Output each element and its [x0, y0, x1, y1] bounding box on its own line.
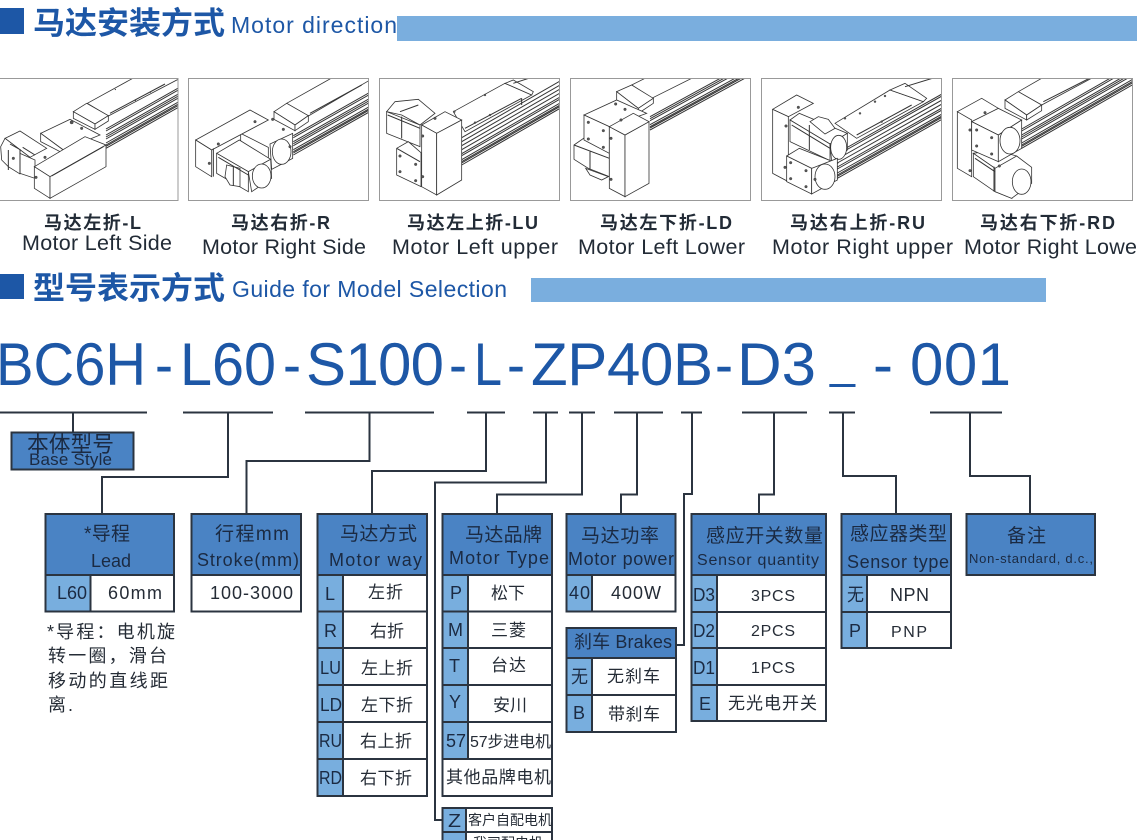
caption: motor right lower: 马达右下折-RD [980, 213, 1115, 233]
table: motor type [442, 514, 552, 796]
table: motor way: 马达方式 [340, 523, 417, 545]
table: sensor type: NPN [890, 585, 929, 605]
table: motor way: 左下折 [361, 696, 413, 715]
table: sensor type: 感应器类型 [850, 523, 947, 545]
note: lead definition: 移动的直线距 [48, 671, 168, 691]
caption: motor right upper [772, 213, 953, 259]
caption: motor right lower [964, 213, 1137, 259]
table: motor type: 松下 [491, 584, 525, 603]
table: brakes: B [573, 703, 585, 723]
caption: motor left lower: Motor Left Lower [578, 235, 745, 259]
caption: motor right side [202, 213, 366, 259]
table: sensor quantity: 感应开关数量 [706, 525, 823, 547]
table: sensor quantity: E [699, 694, 711, 714]
model code [0, 331, 1011, 398]
caption: motor left upper [392, 213, 558, 259]
caption: motor left side [22, 213, 172, 255]
model code: 001 [910, 331, 1011, 398]
model code: L60 [180, 331, 276, 398]
table: motor way: 右下折 [360, 769, 412, 788]
table: stroke: Stroke(mm) [197, 550, 299, 570]
panel: motor left upper [380, 74, 572, 200]
table: remarks [966, 514, 1095, 575]
table: motor way: LU [320, 658, 341, 678]
table: customer motor: Z [448, 811, 461, 831]
table: sensor quantity: Sensor quantity [697, 552, 819, 569]
caption: motor right upper: Motor Right upper [772, 235, 953, 259]
table: customer motor: 客户自配电机 [468, 812, 552, 828]
panel: motor left lower [570, 78, 751, 201]
table: sensor quantity: D2 [693, 621, 715, 641]
table: sensor quantity: 无光电开关 [728, 694, 817, 713]
table: motor way: 左折 [368, 583, 403, 602]
table: motor power: 400W [611, 583, 661, 603]
panel: motor right upper [762, 78, 947, 200]
table: sensor quantity: 1PCS [751, 660, 795, 677]
table: motor type: 其他品牌电机 [446, 768, 551, 787]
table: brakes: 刹车 Brakes [574, 632, 672, 652]
model code: - [507, 331, 525, 398]
table: motor type: 三菱 [491, 621, 526, 640]
model code: - [449, 331, 467, 398]
model code: - [715, 331, 733, 398]
header bar [397, 16, 1137, 41]
table: stroke: 行程mm [215, 523, 289, 545]
table: motor way: RU [319, 731, 342, 751]
table: motor power [566, 514, 676, 612]
table: motor power: 40 [569, 583, 590, 603]
heading: model selection: 型号表示方式 [33, 271, 225, 306]
caption: motor left side: Motor Left Side [22, 231, 172, 255]
model code: L [474, 331, 502, 398]
table: motor way: LD [320, 695, 342, 715]
caption: motor right side: 马达右折-R [231, 213, 330, 233]
table: sensor quantity: D3 [693, 585, 715, 605]
table: motor way [318, 514, 427, 796]
subheading: model selection: Guide for Model Selection [232, 276, 507, 302]
note: lead definition: 转一圈，滑台 [48, 646, 167, 666]
heading: motor direction: 马达安装方式 [33, 6, 225, 41]
note: lead definition: 离. [48, 695, 73, 715]
panel: motor right side [188, 78, 369, 201]
caption: motor left upper: 马达左上折-LU [407, 213, 538, 233]
model code: - [155, 331, 173, 398]
table: motor type: Motor Type [449, 548, 549, 568]
caption: motor right lower: Motor Right Lowe [964, 235, 1137, 259]
table: remarks: Non-standard, d.c., [969, 551, 1093, 566]
table: motor type: 台达 [491, 656, 526, 675]
model code: S100 [306, 331, 444, 398]
model code: ZP40B [531, 331, 713, 398]
model code: _ [829, 336, 856, 388]
table: sensor type: PNP [891, 624, 927, 641]
table: lead: L60 [57, 583, 87, 603]
section header: model selection [0, 271, 1046, 306]
caption: motor left side: 马达左折-L [44, 213, 141, 233]
table: motor type: 57步进电机 [470, 733, 551, 751]
table: motor way: R [324, 621, 337, 641]
caption: motor left lower [578, 213, 745, 259]
model code: - [283, 331, 301, 398]
table: customer motor [442, 808, 552, 840]
note: lead definition: *导程：电机旋 [47, 622, 175, 642]
table: sensor type: 无 [847, 585, 864, 605]
table: motor way: Motor way [329, 550, 422, 570]
table: motor type: 安川 [493, 696, 527, 715]
table: lead: Lead [91, 551, 131, 571]
table: sensor type: Sensor type [847, 552, 949, 572]
table: sensor quantity [692, 514, 826, 721]
label: base style: Base Style [29, 450, 112, 469]
table: lead: *导程 [84, 523, 130, 545]
table: motor type: 马达品牌 [465, 524, 542, 546]
table: sensor quantity: 2PCS [751, 623, 795, 640]
table: brakes: 无刹车 [607, 667, 660, 686]
model code: D3 [737, 331, 816, 398]
panel: motor right lower [952, 78, 1133, 201]
table: sensor quantity: D1 [693, 658, 715, 678]
table: motor type: T [449, 656, 460, 676]
caption: motor right side: Motor Right Side [202, 235, 366, 259]
caption: motor right upper: 马达右上折-RU [790, 213, 925, 233]
label: base style: 本体型号 [27, 432, 114, 457]
connector lines [0, 412, 1030, 820]
section header: motor direction [0, 6, 1137, 41]
table: sensor quantity: 3PCS [751, 588, 795, 605]
table: stroke: 100-3000 [210, 583, 293, 603]
label: base style [12, 432, 134, 470]
subheading: motor direction: Motor direction [231, 12, 397, 38]
table: motor way: L [325, 584, 335, 604]
table: motor power: Motor power [568, 549, 674, 569]
table: brakes: 带刹车 [608, 705, 660, 724]
table: lead: 60mm [108, 583, 162, 603]
table: motor type: 57 [446, 731, 466, 751]
table: sensor type [842, 514, 951, 648]
model code: BC6H [0, 331, 146, 398]
table: motor way: 左上折 [361, 659, 413, 678]
panel: motor left side [0, 78, 178, 201]
table: motor way: 右折 [370, 622, 404, 641]
table: brakes: 无 [571, 667, 588, 687]
table: motor type: P [450, 583, 462, 603]
caption: motor left lower: 马达左下折-LD [600, 213, 732, 233]
table: motor type: M [448, 620, 463, 640]
note: lead definition [47, 622, 175, 715]
model code: - [873, 331, 893, 398]
table: brakes [566, 628, 676, 732]
table: sensor type: P [849, 621, 861, 641]
header bar [531, 278, 1046, 302]
caption: motor left upper: Motor Left upper [392, 235, 558, 259]
table: remarks: 备注 [1007, 525, 1046, 547]
table: lead [46, 514, 174, 612]
table: motor power: 马达功率 [581, 525, 659, 547]
table: stroke [192, 514, 301, 612]
table: motor way: RD [319, 768, 342, 788]
table: motor way: 右上折 [360, 732, 412, 751]
table: motor type: Y [449, 692, 461, 712]
